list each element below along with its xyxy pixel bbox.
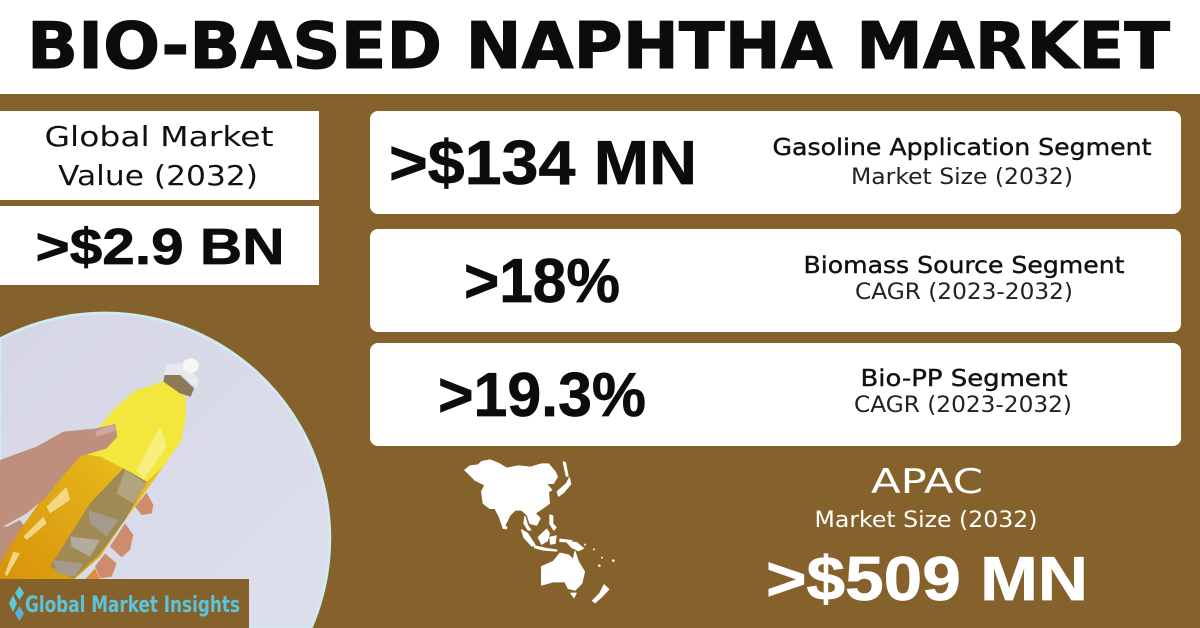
title band bbox=[0, 0, 1200, 94]
panel: global market value figure: >$2.9 BN bbox=[36, 218, 284, 275]
icon: logo diamonds bbox=[9, 586, 24, 621]
bottle neck and cap bbox=[163, 373, 194, 397]
panel: global market value label: Value (2032) bbox=[58, 159, 258, 192]
panel: biomass source segment: Biomass Source Segment bbox=[804, 253, 1124, 279]
text: apac region: APAC bbox=[871, 462, 983, 502]
panel: global market value label: Global Market bbox=[44, 120, 274, 153]
text: apac region: Market Size (2032) bbox=[814, 508, 1038, 533]
panel: gasoline application segment: Gasoline Application Segment bbox=[772, 135, 1152, 161]
bottle body bbox=[0, 382, 186, 580]
hand bbox=[0, 424, 117, 528]
icon: asia pacific map bbox=[465, 460, 614, 603]
panel: biomass source segment bbox=[370, 229, 1181, 332]
panel: biomass source segment: >18% bbox=[464, 247, 620, 316]
panel: bio-pp segment: >19.3% bbox=[438, 361, 646, 430]
panel: global market value label bbox=[0, 111, 319, 200]
panel: biomass source segment: CAGR (2023-2032) bbox=[855, 280, 1073, 305]
panel: global market value figure bbox=[0, 206, 319, 285]
photo: hand holding bottle of bio-naphtha bbox=[0, 313, 330, 628]
logo: global market insights bbox=[0, 579, 249, 628]
panel: gasoline application segment: >$134 MN bbox=[389, 129, 697, 198]
panel: gasoline application segment: Market Size (2032) bbox=[851, 165, 1073, 190]
text: apac region bbox=[766, 462, 1088, 614]
panel: gasoline application segment bbox=[370, 111, 1181, 214]
text: apac region: >$509 MN bbox=[766, 545, 1088, 614]
panel: bio-pp segment: Bio-PP Segment bbox=[860, 366, 1068, 392]
title: BIO-BASED NAPHTHA MARKET bbox=[27, 10, 1170, 84]
panel: bio-pp segment: CAGR (2023-2032) bbox=[854, 393, 1072, 418]
panel: bio-pp segment bbox=[370, 343, 1181, 446]
logo: global market insights: Global Market Insights bbox=[25, 593, 240, 618]
